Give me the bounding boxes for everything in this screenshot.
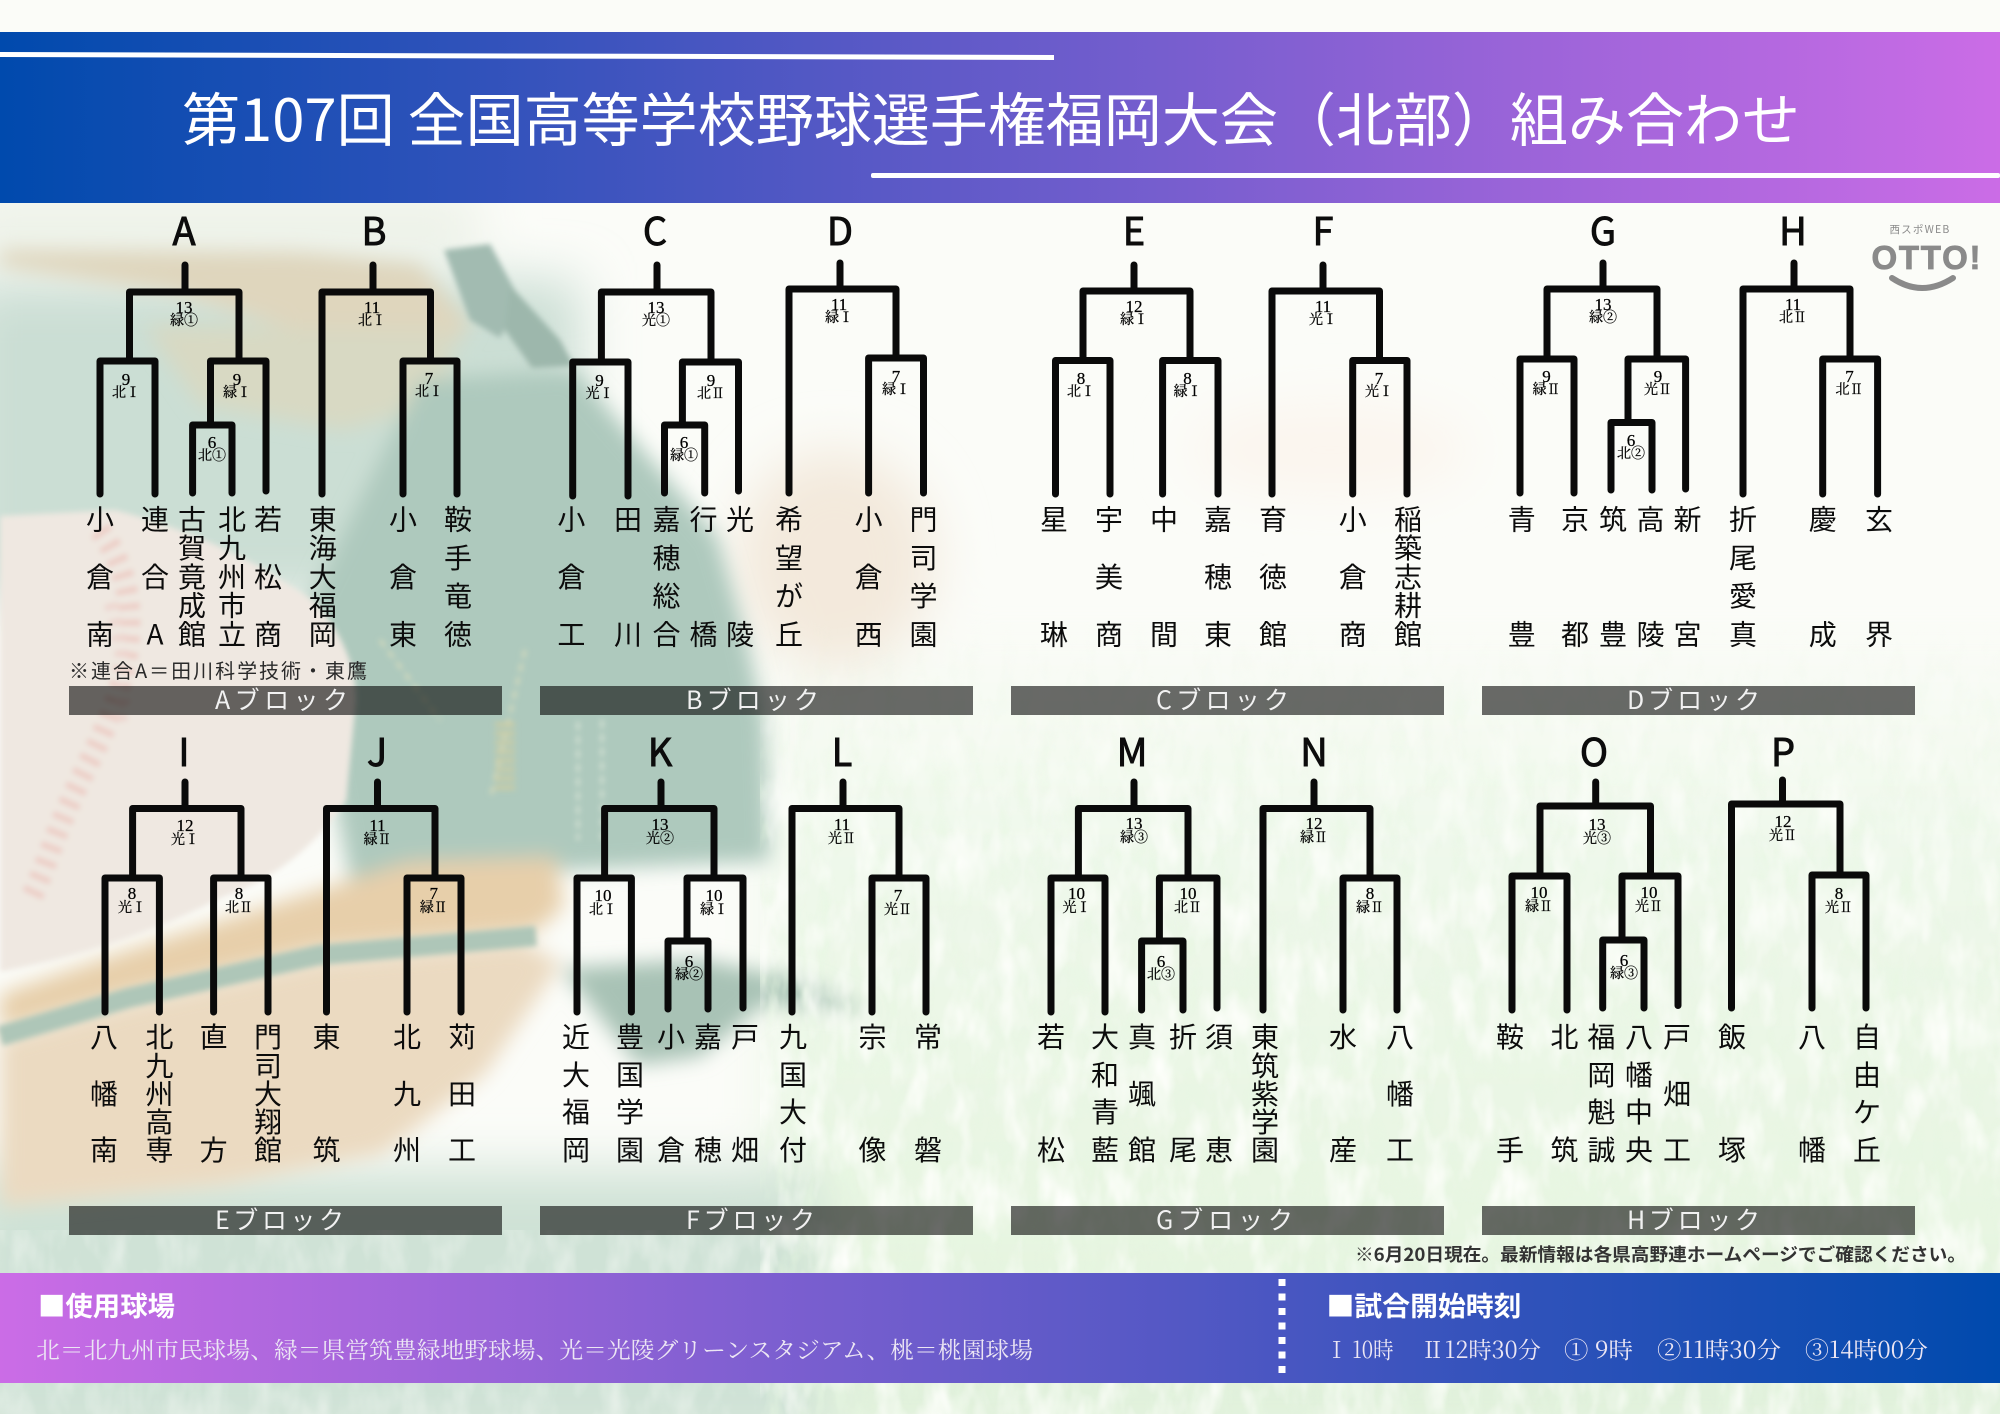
match labels K: 北Ⅰ xyxy=(589,902,617,918)
teams C: 嘉穂総合 xyxy=(652,498,681,654)
footer: start times: ① 9時 xyxy=(1564,1332,1633,1365)
match labels M: 北③ xyxy=(1147,967,1175,983)
match labels G: 緑② xyxy=(1589,310,1617,326)
lines A xyxy=(100,265,266,494)
block bar E xyxy=(69,1201,502,1237)
match labels A: 9 xyxy=(122,370,130,389)
letter I: I xyxy=(178,722,190,777)
match labels M: 13 xyxy=(1126,814,1142,833)
match labels E: 8 xyxy=(1077,369,1085,388)
match labels M: 10 xyxy=(1068,884,1085,903)
teams B: 東海大福岡 xyxy=(309,498,337,654)
block bar C xyxy=(1011,681,1444,717)
title: 第107回 全国高等学校野球選手権福岡大会（北部）組み合わせ xyxy=(182,74,1800,158)
teams L xyxy=(779,1016,942,1169)
bracket O xyxy=(1496,722,1691,1169)
block bar E: Eブロック xyxy=(215,1201,344,1237)
match labels E: 緑Ⅰ xyxy=(1174,384,1202,400)
letter A: A xyxy=(172,201,196,256)
footer: stadiums list: 北＝北九州市民球場、緑＝県営筑豊緑地野球場、光＝光陵グリーンスタジアム、桃＝桃園球場 xyxy=(36,1332,1033,1365)
match labels N xyxy=(1300,814,1384,916)
teams G: 筑豊 xyxy=(1599,498,1627,654)
match labels I: 光Ⅰ xyxy=(171,831,199,848)
teams L: 宗像 xyxy=(858,1016,887,1169)
match labels N: 8 xyxy=(1366,884,1374,903)
match labels C: 光Ⅰ xyxy=(586,385,614,402)
letter F: F xyxy=(1313,201,1333,256)
match labels P: 12 xyxy=(1774,812,1792,831)
block bar A xyxy=(69,681,502,717)
header top rule xyxy=(0,52,1054,60)
match labels O: 13 xyxy=(1588,815,1606,834)
bracket N xyxy=(1251,722,1414,1169)
match labels A: 13 xyxy=(176,298,192,317)
match labels M: 緑③ xyxy=(1120,830,1148,846)
teams A: 若松商 xyxy=(254,498,282,654)
teams I: 八幡南 xyxy=(90,1016,118,1169)
footer: start times: ②11時30分 xyxy=(1657,1332,1781,1365)
teams G xyxy=(1508,498,1702,654)
teams K: 近大福岡 xyxy=(562,1016,590,1169)
teams G: 新宮 xyxy=(1673,498,1702,654)
match labels A xyxy=(112,298,251,464)
logo: OTTO! xyxy=(1872,222,1980,288)
teams H: 折尾愛真 xyxy=(1729,498,1757,654)
teams P: 自由ケ丘 xyxy=(1853,1016,1881,1169)
match labels H: 北Ⅱ xyxy=(1836,382,1864,398)
letter E: E xyxy=(1123,201,1145,256)
teams E: 中間 xyxy=(1150,498,1178,654)
lines E xyxy=(1056,265,1218,494)
match labels M xyxy=(1062,814,1202,983)
lines P xyxy=(1732,780,1866,1008)
match labels G: 9 xyxy=(1654,367,1662,386)
match labels F xyxy=(1309,297,1393,400)
teams N: 八幡工 xyxy=(1386,1016,1414,1169)
teams P: 飯塚 xyxy=(1718,1016,1746,1169)
teams E: 星琳 xyxy=(1040,498,1068,654)
note: current as of June 20: ※6月20日現在。最新情報は各県高野連ホームページでご確認ください。 xyxy=(1355,1241,1966,1267)
block bar H: Hブロック xyxy=(1627,1201,1760,1237)
teams A: 北九州市立 xyxy=(218,498,246,654)
teams L: 九国大付 xyxy=(779,1016,807,1169)
teams A xyxy=(86,498,282,654)
match labels G xyxy=(1532,295,1672,462)
block bar D: Dブロック xyxy=(1627,681,1760,717)
footer: start times heading: ■試合開始時刻 xyxy=(1326,1285,1522,1324)
teams F: 育徳館 xyxy=(1259,498,1287,654)
letter C: C xyxy=(643,201,667,256)
match labels G: 光Ⅱ xyxy=(1644,381,1672,398)
footer: stadiums heading: ■使用球場 xyxy=(38,1285,175,1324)
match labels I: 光Ⅰ xyxy=(118,899,146,916)
match labels B: 北Ⅰ xyxy=(415,384,443,400)
teams A: 連合A xyxy=(141,498,169,654)
lines B xyxy=(322,265,457,494)
teams A: 小倉南 xyxy=(86,498,114,654)
letter J: J xyxy=(367,722,387,777)
match labels M: 10 xyxy=(1180,884,1196,903)
match labels J: 緑Ⅱ xyxy=(364,832,392,848)
teams I: 門司大翔館 xyxy=(254,1016,282,1169)
teams P xyxy=(1718,1016,1881,1169)
note: 連合A: ※連合A＝田川科学技術・東鷹 xyxy=(69,655,367,684)
match labels K: 6 xyxy=(685,952,693,971)
match labels G: 北② xyxy=(1617,446,1645,462)
match labels H: 北Ⅱ xyxy=(1779,310,1807,326)
match labels G: 6 xyxy=(1627,431,1635,450)
teams E: 嘉穂東 xyxy=(1204,498,1232,654)
teams E: 宇美商 xyxy=(1095,498,1123,654)
match labels H: 7 xyxy=(1845,367,1854,386)
teams K: 戸畑 xyxy=(731,1016,759,1169)
bracket E xyxy=(1040,201,1232,654)
teams F: 小倉商 xyxy=(1339,498,1367,654)
match labels I: 12 xyxy=(176,816,194,835)
match labels F: 7 xyxy=(1375,369,1384,388)
match labels I: 8 xyxy=(128,884,136,903)
footer: dotted divider xyxy=(1278,1279,1286,1378)
teams H: 玄界 xyxy=(1865,498,1893,654)
block bar F xyxy=(540,1201,973,1237)
teams F: 稲築志耕館 xyxy=(1394,498,1422,654)
letter O: O xyxy=(1580,722,1608,777)
teams M: 真颯館 xyxy=(1128,1016,1156,1169)
match labels L: 11 xyxy=(834,815,850,834)
teams G: 高陵 xyxy=(1636,498,1665,654)
match labels H: 11 xyxy=(1785,295,1801,314)
teams O: 鞍手 xyxy=(1496,1016,1524,1169)
match labels D: 7 xyxy=(892,367,901,386)
letter G: G xyxy=(1590,201,1616,256)
match labels P: 光Ⅱ xyxy=(1769,827,1797,844)
block bar G: Gブロック xyxy=(1156,1201,1293,1237)
match labels E: 12 xyxy=(1126,297,1142,316)
match labels I: 北Ⅱ xyxy=(225,900,253,916)
teams N: 水産 xyxy=(1329,1016,1357,1169)
teams K: 豊国学園 xyxy=(616,1016,644,1169)
teams J: 北九州 xyxy=(393,1016,421,1169)
block bar B xyxy=(540,681,973,717)
teams O: 八幡中央 xyxy=(1625,1016,1653,1169)
match labels K: 13 xyxy=(652,815,668,834)
match labels N: 緑Ⅱ xyxy=(1356,900,1384,916)
match labels C: 9 xyxy=(707,371,715,390)
match labels N: 緑Ⅱ xyxy=(1300,830,1328,846)
match labels O: 10 xyxy=(1640,883,1658,902)
teams G: 青豊 xyxy=(1508,498,1536,654)
match labels E: 8 xyxy=(1183,369,1192,388)
block bar H xyxy=(1482,1201,1915,1237)
letter H: H xyxy=(1779,201,1807,256)
teams I xyxy=(90,1016,282,1169)
match labels P: 8 xyxy=(1835,884,1843,903)
bracket A xyxy=(86,201,282,654)
match labels F: 光Ⅰ xyxy=(1365,383,1393,400)
match labels O: 6 xyxy=(1620,951,1628,970)
teams B: 鞍手竜徳 xyxy=(444,498,472,654)
match labels O: 緑③ xyxy=(1610,966,1638,982)
teams C: 田川 xyxy=(614,498,642,654)
letter D: D xyxy=(827,201,853,256)
letter N: N xyxy=(1300,722,1328,777)
match labels L: 光Ⅱ xyxy=(828,830,856,847)
teams O: 北筑 xyxy=(1550,1016,1578,1169)
bracket I xyxy=(90,722,282,1169)
match labels K: 緑Ⅰ xyxy=(700,902,728,918)
teams D: 門司学園 xyxy=(909,498,938,654)
match labels K: 10 xyxy=(706,886,722,905)
match labels O: 光③ xyxy=(1583,830,1611,847)
match labels J: 緑Ⅱ xyxy=(420,900,448,916)
teams P: 八幡 xyxy=(1798,1016,1826,1169)
match labels H xyxy=(1779,295,1864,398)
teams M: 大和青藍 xyxy=(1091,1016,1119,1169)
match labels D: 11 xyxy=(831,295,847,314)
match labels J: 11 xyxy=(369,816,386,835)
match labels I xyxy=(118,816,253,916)
bracket B xyxy=(309,201,472,654)
teams J: 苅田工 xyxy=(448,1016,476,1169)
letter B: B xyxy=(362,201,386,256)
lines F xyxy=(1272,265,1407,494)
teams C: 行橋 xyxy=(689,498,718,654)
bracket H xyxy=(1729,201,1893,654)
lines D xyxy=(789,263,924,493)
match labels C: 光① xyxy=(642,312,670,329)
teams M: 若松 xyxy=(1037,1016,1065,1169)
lines H xyxy=(1743,263,1878,494)
block bar C: Cブロック xyxy=(1156,681,1289,717)
match labels C: 13 xyxy=(648,298,664,317)
teams M xyxy=(1037,1016,1233,1169)
match labels O xyxy=(1525,815,1663,982)
teams B: 小倉東 xyxy=(389,498,417,654)
footer: start times: Ⅰ 10時 xyxy=(1326,1332,1394,1365)
logo: OTTO!: 西スポWEB xyxy=(1889,222,1951,237)
lines M xyxy=(1051,782,1217,1012)
match labels K xyxy=(589,815,728,983)
lines J xyxy=(326,782,461,1012)
lines K xyxy=(577,782,743,1012)
teams D: 希望が丘 xyxy=(775,498,803,654)
bracket D xyxy=(775,201,938,654)
letter L: L xyxy=(832,722,852,777)
teams J: 東筑 xyxy=(312,1016,341,1169)
match labels A: 9 xyxy=(233,370,241,389)
match labels M: 光Ⅰ xyxy=(1062,899,1090,916)
match labels I: 8 xyxy=(235,884,243,903)
bracket C xyxy=(557,201,754,654)
match labels M: 北Ⅱ xyxy=(1174,900,1202,916)
logo: OTTO!: OTTO! xyxy=(1872,239,1980,276)
teams C: 光陵 xyxy=(726,498,754,654)
match labels F: 光Ⅰ xyxy=(1309,311,1337,328)
header band xyxy=(0,32,2000,203)
teams C xyxy=(557,498,754,654)
teams H: 慶成 xyxy=(1809,498,1837,654)
match labels A: 北① xyxy=(198,448,226,464)
match labels K: 光② xyxy=(646,830,674,847)
match labels O: 光Ⅱ xyxy=(1635,898,1663,915)
teams L: 常磐 xyxy=(914,1016,942,1169)
match labels E xyxy=(1067,297,1202,400)
teams N: 東筑紫学園 xyxy=(1251,1016,1279,1169)
match labels A: 緑① xyxy=(170,313,198,329)
lines L xyxy=(792,782,926,1012)
teams H xyxy=(1729,498,1893,654)
match labels G: 緑Ⅱ xyxy=(1532,382,1560,398)
match labels C xyxy=(586,298,725,464)
teams D: 小倉西 xyxy=(855,498,883,654)
bracket G xyxy=(1508,201,1702,654)
match labels G: 13 xyxy=(1594,295,1612,314)
letter K: K xyxy=(648,722,673,777)
match labels C: 9 xyxy=(595,371,604,390)
bracket P xyxy=(1718,722,1881,1169)
teams O: 福岡魁誠 xyxy=(1587,1016,1615,1169)
match labels C: 6 xyxy=(680,433,688,452)
match labels B: 11 xyxy=(364,298,380,317)
match labels A: 6 xyxy=(208,433,216,452)
letter M: M xyxy=(1117,722,1147,777)
match labels O: 緑Ⅱ xyxy=(1525,899,1553,915)
block bar B: Bブロック xyxy=(686,681,819,717)
teams N xyxy=(1251,1016,1414,1169)
teams C: 小倉工 xyxy=(557,498,585,654)
teams B xyxy=(309,498,472,654)
match labels A: 北Ⅰ xyxy=(112,385,140,401)
teams J xyxy=(312,1016,476,1169)
block bar D xyxy=(1482,681,1915,717)
match labels P xyxy=(1769,812,1853,916)
match labels P: 光Ⅱ xyxy=(1825,899,1853,916)
match labels G: 9 xyxy=(1542,367,1551,386)
match labels B: 北Ⅰ xyxy=(358,313,386,329)
teams I: 直方 xyxy=(200,1016,228,1169)
match labels C: 緑① xyxy=(670,448,698,464)
match labels J: 7 xyxy=(429,884,438,903)
match labels F: 11 xyxy=(1315,297,1331,316)
lines G xyxy=(1520,263,1686,493)
teams K: 嘉穂 xyxy=(694,1016,722,1169)
lines C xyxy=(573,265,738,496)
bracket F xyxy=(1259,201,1422,654)
teams E xyxy=(1040,498,1232,654)
match labels B: 7 xyxy=(425,369,434,388)
footer: start times: ③14時00分 xyxy=(1805,1332,1928,1365)
teams M: 折尾 xyxy=(1169,1016,1197,1169)
block bar F: Fブロック xyxy=(686,1201,815,1237)
match labels J xyxy=(364,816,448,916)
match labels L: 光Ⅱ xyxy=(884,901,912,918)
bracket J xyxy=(312,722,476,1169)
teams D xyxy=(775,498,938,654)
match labels M: 6 xyxy=(1157,952,1165,971)
footer: start times xyxy=(1326,1332,1928,1365)
match labels L: 7 xyxy=(894,886,903,905)
match labels K: 10 xyxy=(594,886,612,905)
match labels D xyxy=(825,295,910,398)
block bar A: Aブロック xyxy=(215,681,348,717)
teams O: 戸畑工 xyxy=(1663,1016,1691,1169)
teams G: 京都 xyxy=(1561,498,1589,654)
match labels E: 緑Ⅰ xyxy=(1120,312,1148,328)
bracket K xyxy=(562,722,759,1169)
footer band xyxy=(0,1273,2000,1383)
bracket M xyxy=(1037,722,1233,1169)
match labels B xyxy=(358,298,443,400)
match labels C: 北Ⅱ xyxy=(697,386,725,402)
teams K: 小倉 xyxy=(657,1016,685,1169)
bracket L xyxy=(779,722,942,1169)
match labels E: 北Ⅰ xyxy=(1067,384,1095,400)
lines I xyxy=(105,782,268,1012)
lines N xyxy=(1263,782,1397,1010)
header bottom rule xyxy=(871,173,2000,178)
teams F xyxy=(1259,498,1422,654)
match labels K: 緑② xyxy=(675,967,703,983)
match labels A: 緑Ⅰ xyxy=(223,385,251,401)
teams K xyxy=(562,1016,759,1169)
match labels D: 緑Ⅰ xyxy=(882,382,910,398)
block bar G xyxy=(1011,1201,1444,1237)
teams O xyxy=(1496,1016,1691,1169)
match labels D: 緑Ⅰ xyxy=(825,310,853,326)
match labels N: 12 xyxy=(1306,814,1322,833)
teams M: 須恵 xyxy=(1205,1016,1233,1169)
match labels O: 10 xyxy=(1530,883,1548,902)
match labels L xyxy=(828,815,912,918)
footer: start times: Ⅱ12時30分 xyxy=(1421,1332,1541,1365)
teams I: 北九州高専 xyxy=(145,1016,173,1169)
letter P: P xyxy=(1771,722,1795,777)
teams A: 古賀竟成館 xyxy=(178,498,206,654)
lines O xyxy=(1512,782,1678,1010)
